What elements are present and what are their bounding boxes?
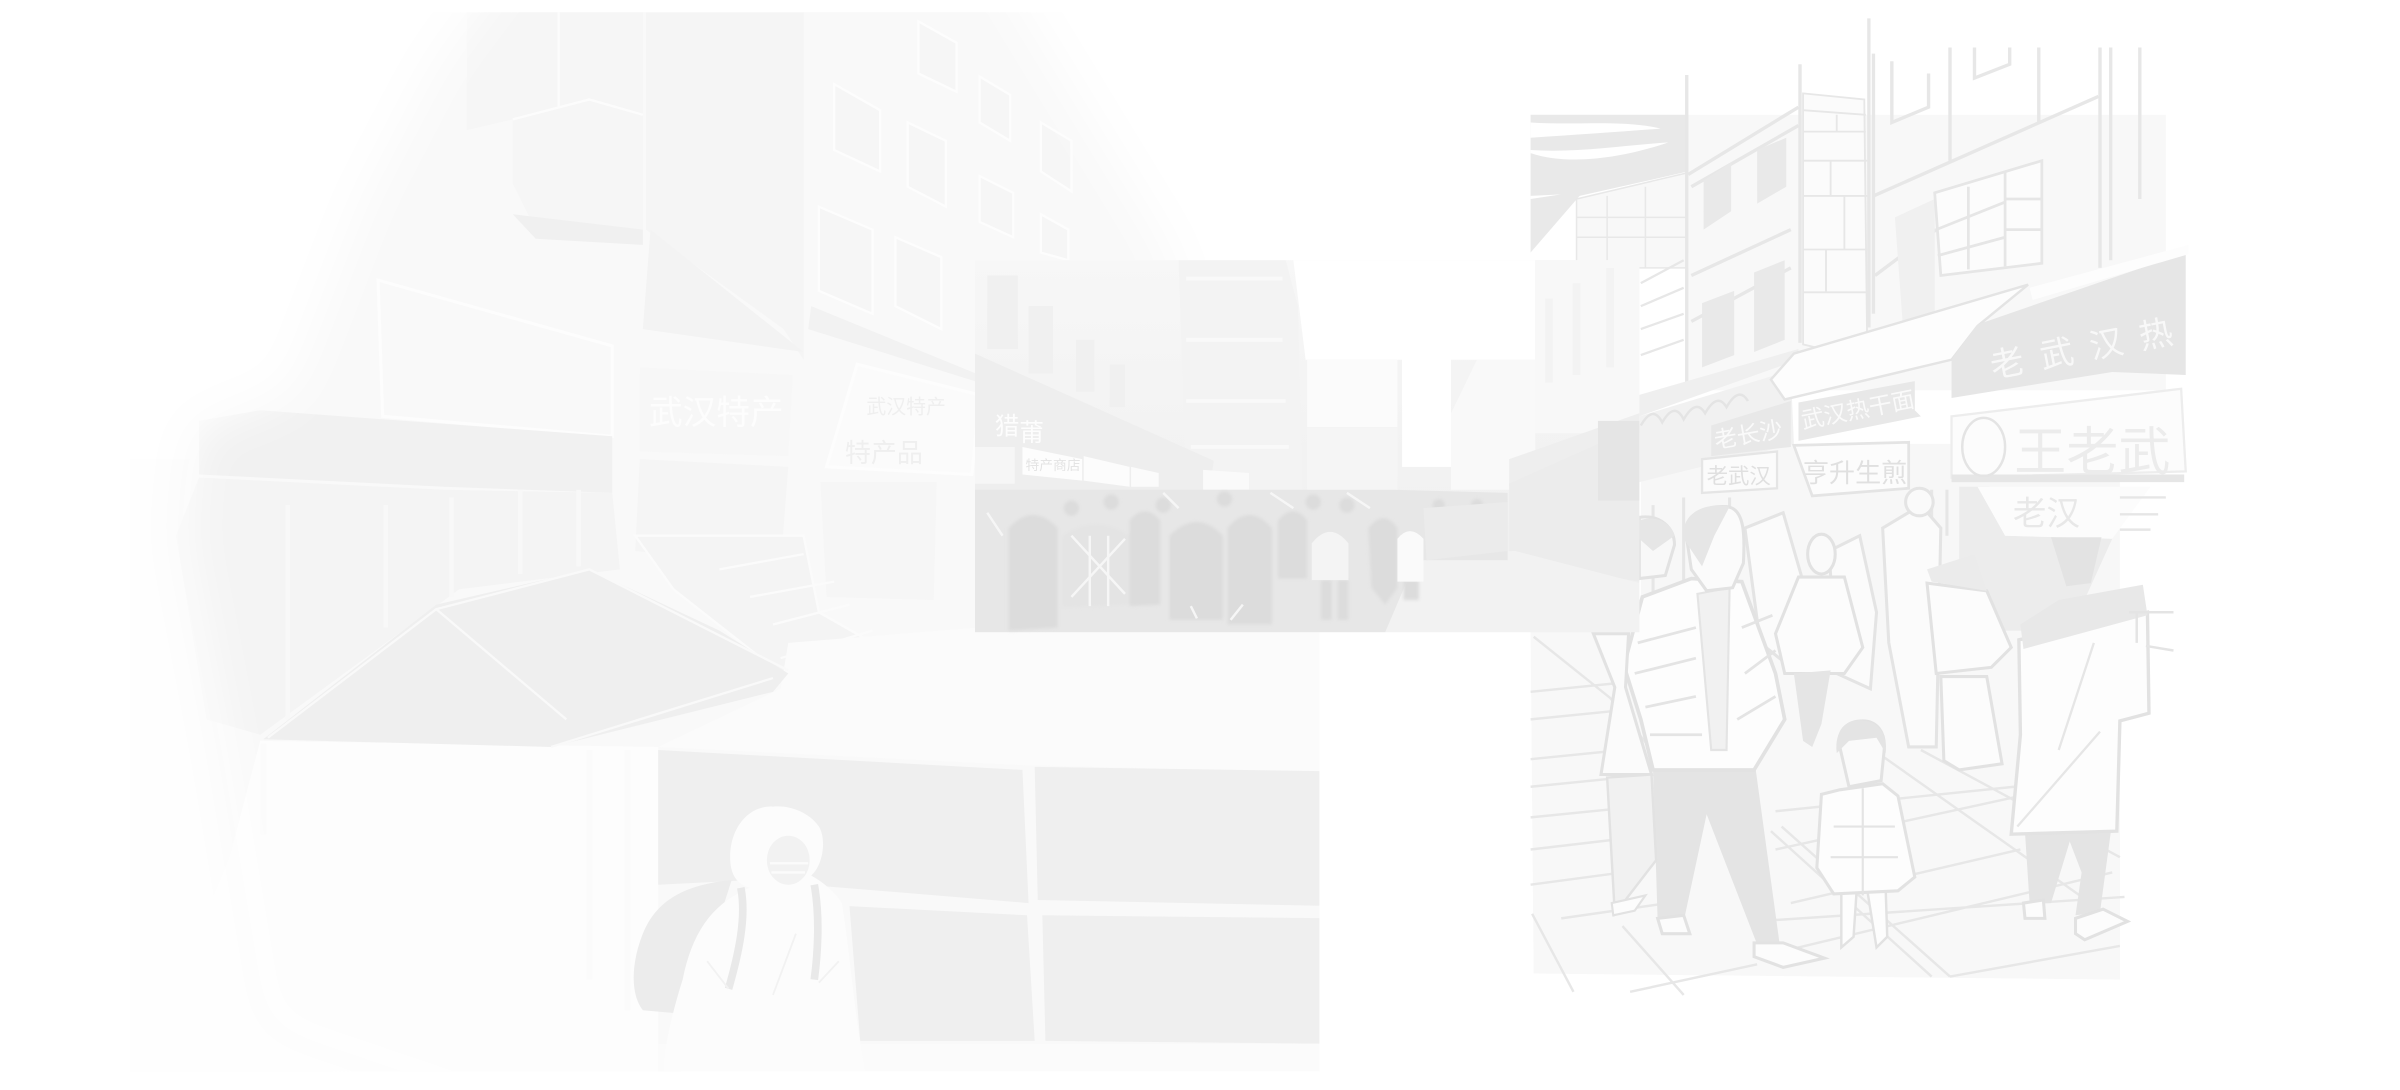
upper windows (1702, 138, 1935, 367)
building lines (1687, 18, 2140, 383)
faint page panel (130, 459, 681, 1071)
hanging banner (1978, 487, 2166, 539)
shop awning and sign row (975, 354, 1249, 493)
straps (729, 885, 818, 989)
child (1817, 720, 1915, 947)
crowd band (975, 490, 1508, 632)
upper windows (819, 21, 1071, 329)
head (1686, 507, 1744, 591)
dark right awning: 老武汉热 (1987, 310, 2193, 386)
tent roof (263, 569, 788, 747)
store shutter and sign 武汉特产 (635, 230, 804, 566)
backpack (634, 880, 732, 1013)
upper facade backdrop (1687, 115, 2166, 390)
white foot strip (658, 1044, 1332, 1074)
man with puffer jacket (1624, 506, 1824, 967)
white sign 老武汉: 老武汉 (1707, 465, 1771, 489)
left building block (1179, 260, 1303, 490)
lower dark wall (176, 478, 620, 735)
trousers (1653, 758, 1780, 947)
steps (635, 536, 872, 712)
scalloped shop band and sign 老长沙 (1639, 370, 1794, 482)
shoes (1658, 915, 1824, 967)
dark left awning (494, 428, 612, 438)
road (1370, 551, 1639, 632)
small awning left (1639, 349, 1798, 416)
store interior (1641, 444, 2120, 673)
mid pedestrian (1776, 534, 1863, 747)
background illustration canvas (199, 12, 2187, 1044)
scalloped shop band and sign 老长沙: 老长沙 (1712, 416, 1785, 453)
dark right awning (1952, 245, 2193, 398)
pale ground (658, 628, 1347, 773)
shop awning and sign row: 特产商店 (1026, 458, 1081, 473)
sky block (1531, 115, 1688, 268)
right shops (1509, 426, 1639, 582)
building wall (130, 0, 1339, 1090)
bay window (1935, 161, 2042, 276)
market stall pieces (2129, 612, 2173, 651)
white sign: 亨升生煎: 亨升生煎 (1803, 458, 1907, 488)
companion with umbrella (1593, 517, 1674, 915)
striped inner (1697, 588, 1730, 750)
second shop awning and sign: 武汉特产 (866, 396, 946, 418)
blank signboard (378, 280, 612, 436)
shop awning and sign row: 莆 (1019, 419, 1044, 447)
dark building column (646, 12, 804, 360)
panel: street photograph (975, 260, 1639, 632)
mask face (767, 836, 810, 885)
background pedestrians (1745, 505, 1941, 747)
shop awning and sign row: 猎 (995, 413, 1019, 441)
crowd (975, 490, 1508, 632)
second shop awning and sign: 特产品 (845, 438, 923, 468)
large white store sign (1952, 389, 2186, 482)
standing woman with fur collar (1927, 554, 2011, 770)
right shop awning (1509, 413, 1639, 487)
large white store sign: 王老武 (2014, 424, 2170, 482)
panel: pen drawing of busy street (1531, 18, 2193, 995)
sky (1293, 260, 1535, 467)
left facade windows (987, 276, 1125, 407)
woman in long coat from behind (2011, 537, 2149, 940)
panel: quarantine street painting (199, 12, 1320, 1044)
far white buildings (1307, 360, 1397, 427)
suit body (673, 806, 826, 1014)
store shutter and sign 武汉特产: 武汉特产 (649, 394, 784, 432)
pale lower wall (130, 741, 658, 1090)
jacket (1624, 579, 1785, 770)
brick wall (1577, 173, 1687, 268)
brick tower (1803, 93, 1867, 360)
right building (1535, 260, 1639, 433)
white sign 老武汉 (1702, 452, 1777, 493)
second shop awning and sign (846, 396, 944, 464)
hanging banner: 老汉 (2013, 495, 2080, 533)
air conditioner box (514, 214, 642, 244)
pavement (1531, 631, 2124, 995)
tall man head (1906, 488, 1933, 516)
dark sign: 武汉热干面: 武汉热干面 (1799, 386, 1917, 433)
grey hoarding panels (658, 750, 1339, 1044)
white sign: 亨升生煎 (1794, 442, 1909, 496)
white striped awning (1771, 285, 2028, 399)
figure in protective suit (634, 806, 826, 1013)
small left building (1641, 260, 1684, 355)
photo base (975, 260, 1639, 632)
